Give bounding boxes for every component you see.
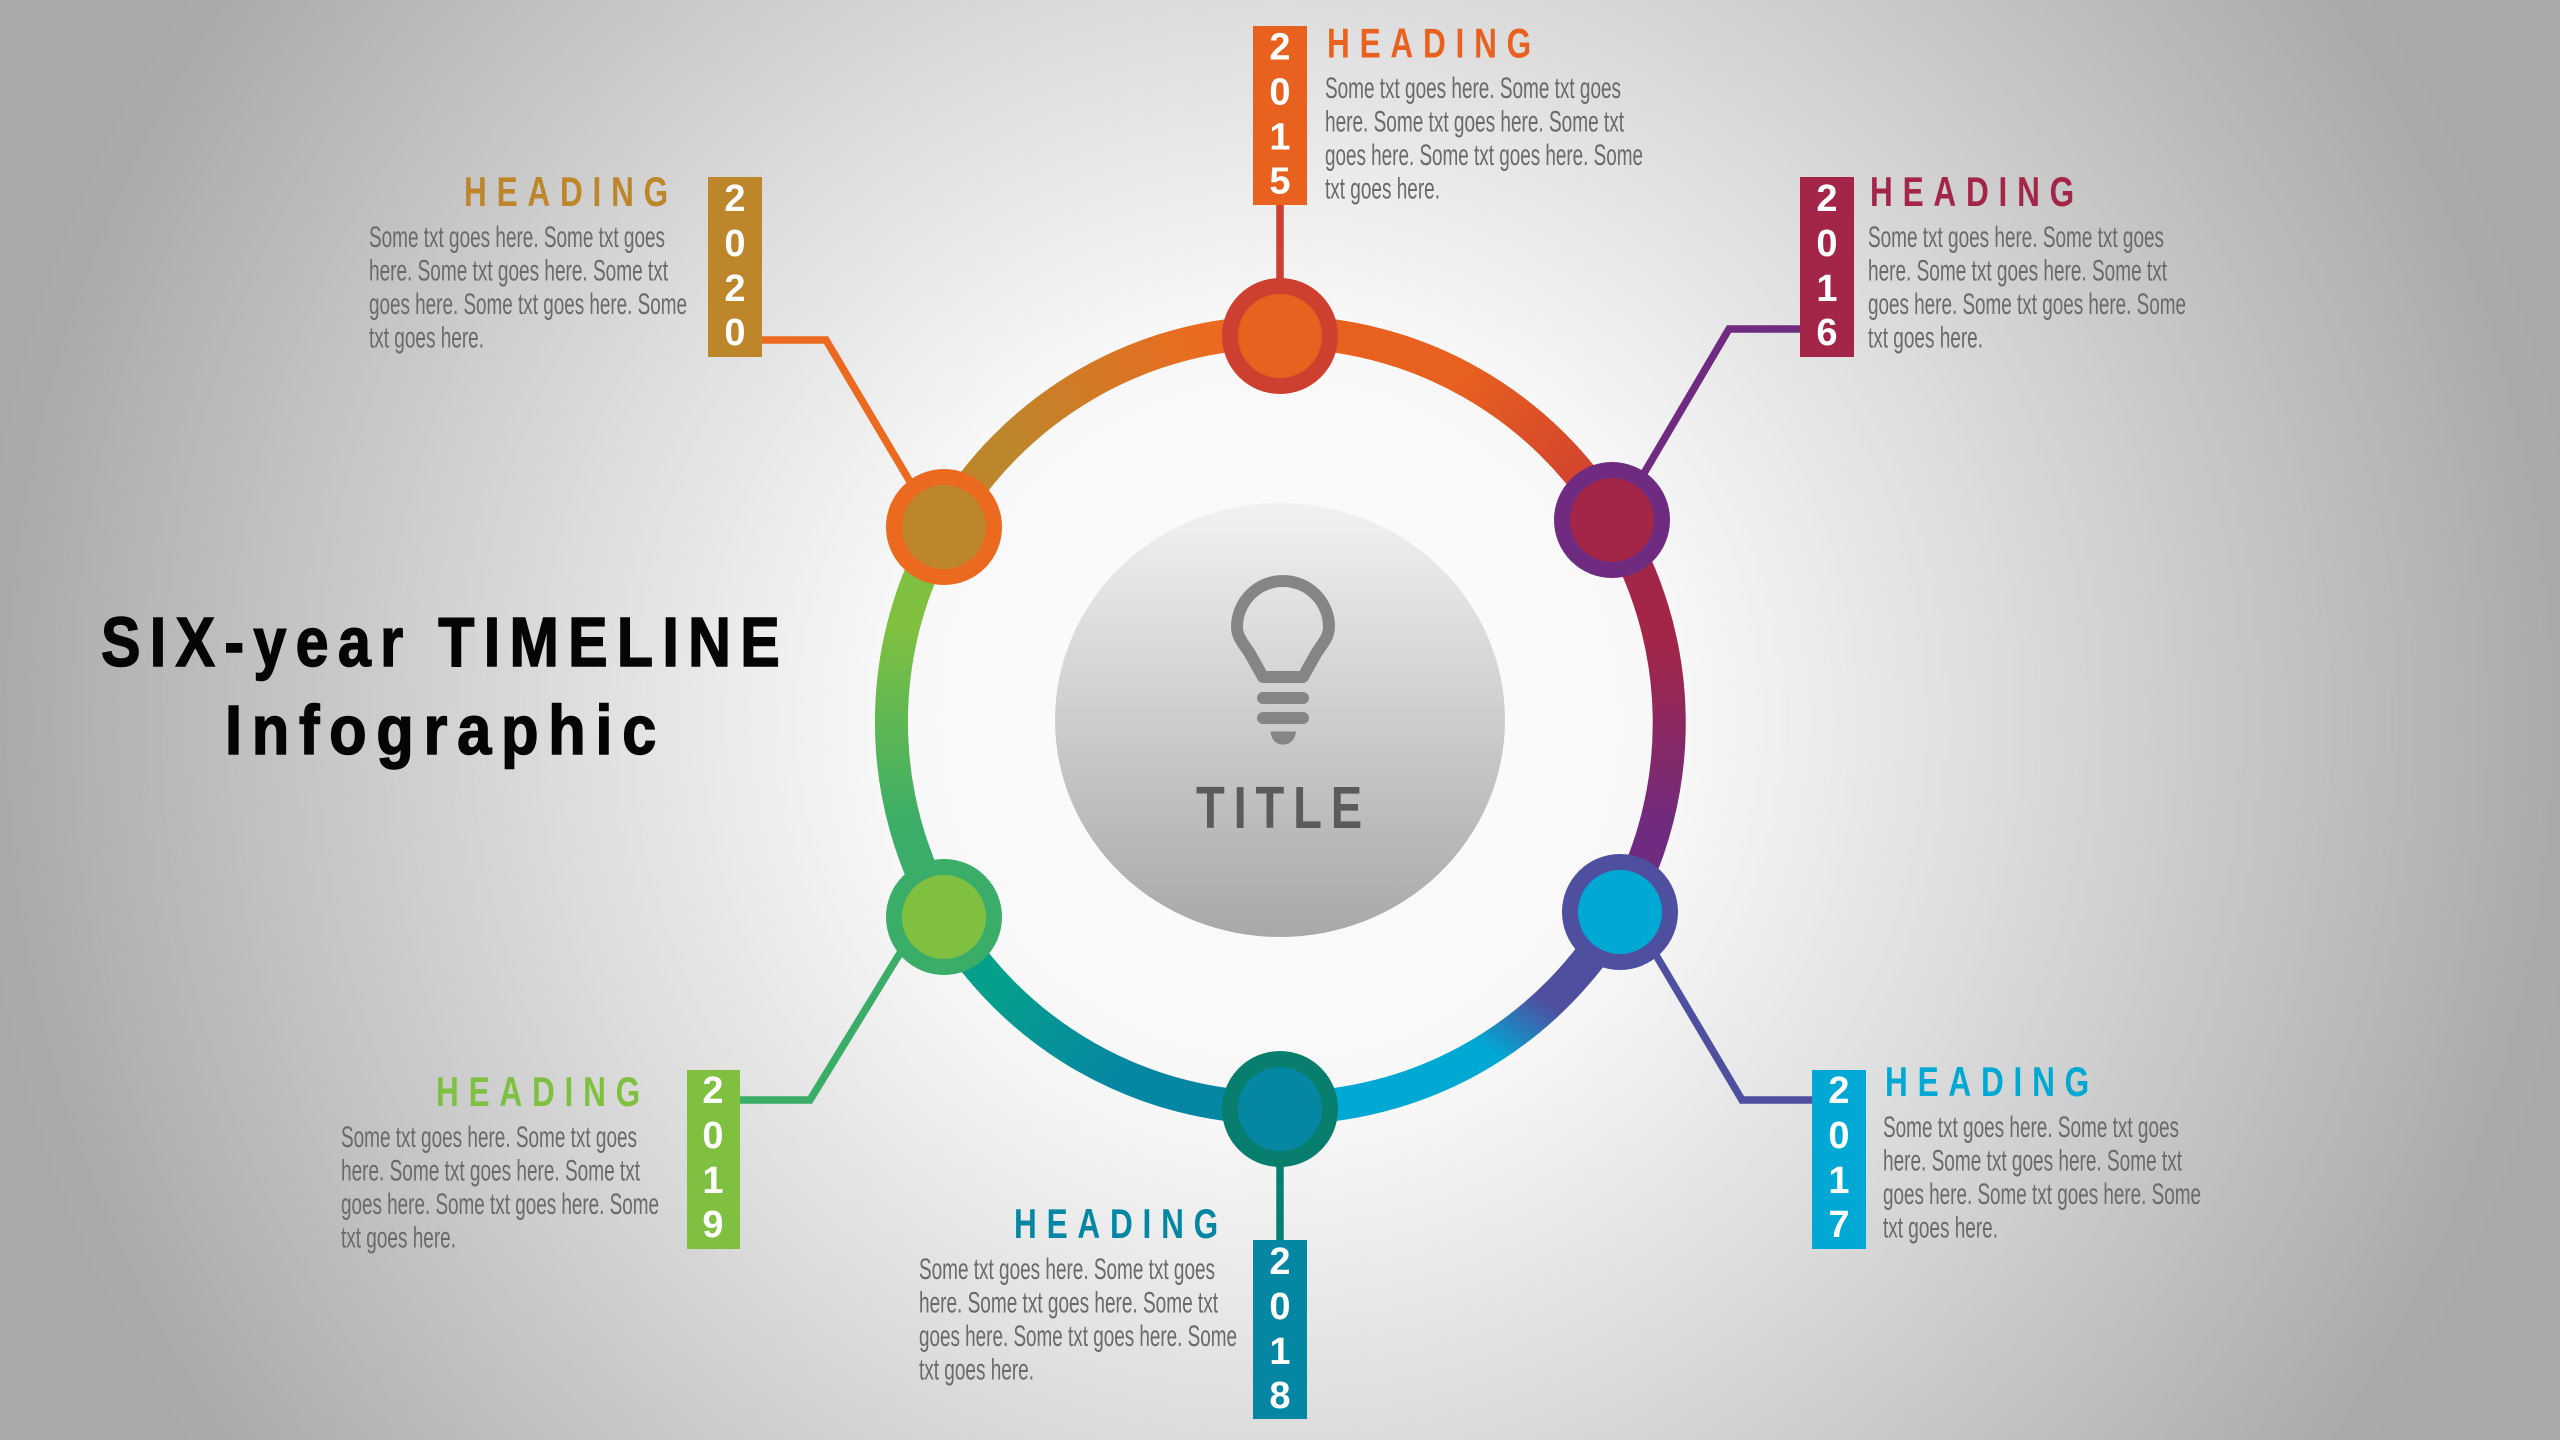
body text 2020: txt goes here.	[369, 322, 484, 354]
year badge 2017	[1812, 1070, 1866, 1249]
year badge 2020: 2	[724, 268, 746, 310]
title: six-year timeline infographic	[101, 603, 789, 769]
year badge 2015: 5	[1269, 160, 1291, 202]
body text 2016: txt goes here.	[1868, 322, 1983, 354]
year badge 2019: 9	[702, 1204, 724, 1246]
year badge 2016: 0	[1816, 223, 1838, 265]
body text 2016	[1868, 221, 2186, 354]
year badge 2017: 0	[1828, 1115, 1850, 1157]
year badge 2020: 0	[724, 223, 746, 265]
body text 2017: goes here. Some txt goes here. Some	[1883, 1178, 2201, 1211]
body text 2017	[1883, 1111, 2201, 1244]
heading 2018: HEADING	[1014, 1200, 1228, 1247]
year badge 2018	[1253, 1240, 1307, 1419]
year badge 2016: 6	[1816, 312, 1838, 354]
body text 2015: Some txt goes here. Some txt goes	[1325, 72, 1621, 105]
year badge 2018: 0	[1269, 1286, 1291, 1328]
year badge 2016: 1	[1816, 268, 1838, 310]
node: 2016	[1554, 462, 1670, 578]
year badge 2017: 2	[1828, 1070, 1850, 1112]
body text 2020: Some txt goes here. Some txt goes	[369, 221, 665, 254]
heading 2019: HEADING	[436, 1068, 650, 1115]
year badge 2018: 1	[1269, 1331, 1291, 1373]
body text 2018	[919, 1253, 1237, 1386]
centre title: TITLE	[1196, 775, 1371, 841]
body text 2019	[341, 1121, 659, 1254]
year badge 2019: 1	[702, 1160, 724, 1202]
body text 2019: Some txt goes here. Some txt goes	[341, 1121, 637, 1154]
body text 2018: goes here. Some txt goes here. Some	[919, 1320, 1237, 1353]
icon: light bulb	[1237, 581, 1329, 744]
body text 2017: here. Some txt goes here. Some txt	[1883, 1144, 2182, 1178]
year badge 2019: 2	[702, 1070, 724, 1112]
heading 2020: HEADING	[464, 168, 678, 215]
year badge 2016: 2	[1816, 178, 1838, 220]
panel: 2017	[1812, 1058, 2201, 1249]
node: 2019	[886, 859, 1002, 975]
title: six-year timeline infographic: Infographic	[225, 691, 666, 769]
body text 2018: Some txt goes here. Some txt goes	[919, 1253, 1215, 1286]
node: 2017	[1562, 854, 1678, 970]
title: six-year timeline infographic: SIX-year TIMELINE	[101, 603, 789, 681]
body text 2019: goes here. Some txt goes here. Some	[341, 1188, 659, 1221]
body text 2015: goes here. Some txt goes here. Some	[1325, 139, 1643, 172]
year badge 2016	[1800, 177, 1854, 357]
body text 2018: here. Some txt goes here. Some txt	[919, 1286, 1218, 1320]
year badge 2015: 2	[1269, 26, 1291, 68]
body text 2015: txt goes here.	[1325, 172, 1440, 206]
body text 2015: here. Some txt goes here. Some txt	[1325, 106, 1624, 138]
year badge 2015: 1	[1269, 116, 1291, 158]
year badge 2019: 0	[702, 1115, 724, 1157]
body text 2015	[1325, 72, 1643, 206]
panel: 2016	[1800, 168, 2186, 357]
node: 2020	[886, 469, 1002, 585]
year badge 2018: 2	[1269, 1241, 1291, 1283]
year badge 2019	[687, 1070, 740, 1249]
year badge 2020: 2	[724, 178, 746, 220]
heading 2015: HEADING	[1327, 20, 1541, 66]
panel: 2015	[1253, 20, 1643, 206]
body text 2019: here. Some txt goes here. Some txt	[341, 1154, 640, 1188]
connector lines	[740, 205, 1812, 1240]
year badge 2020: 0	[724, 312, 746, 354]
panel: 2020	[369, 168, 762, 357]
body text 2016: Some txt goes here. Some txt goes	[1868, 221, 2164, 254]
panel: 2018	[919, 1200, 1307, 1419]
body text 2020: here. Some txt goes here. Some txt	[369, 254, 668, 288]
body text 2019: txt goes here.	[341, 1222, 456, 1254]
year badge 2017: 7	[1828, 1204, 1850, 1246]
year badge 2015	[1253, 26, 1307, 205]
centre disc	[1055, 503, 1505, 937]
year badge 2015: 0	[1269, 72, 1291, 114]
heading 2017: HEADING	[1885, 1058, 2099, 1105]
year badge 2018: 8	[1269, 1375, 1291, 1417]
body text 2020: goes here. Some txt goes here. Some	[369, 288, 687, 321]
panel: 2019	[341, 1068, 740, 1254]
year badge 2020	[708, 177, 762, 357]
body text 2016: here. Some txt goes here. Some txt	[1868, 254, 2167, 288]
body text 2020	[369, 221, 687, 354]
body text 2017: Some txt goes here. Some txt goes	[1883, 1111, 2179, 1144]
body text 2016: goes here. Some txt goes here. Some	[1868, 288, 2186, 321]
node: 2015	[1222, 278, 1338, 394]
year badge 2017: 1	[1828, 1160, 1850, 1202]
gradient ring	[891, 332, 1669, 1108]
node: 2018	[1222, 1051, 1338, 1167]
body text 2017: txt goes here.	[1883, 1212, 1998, 1244]
body text 2018: txt goes here.	[919, 1354, 1034, 1386]
heading 2016: HEADING	[1870, 168, 2084, 215]
